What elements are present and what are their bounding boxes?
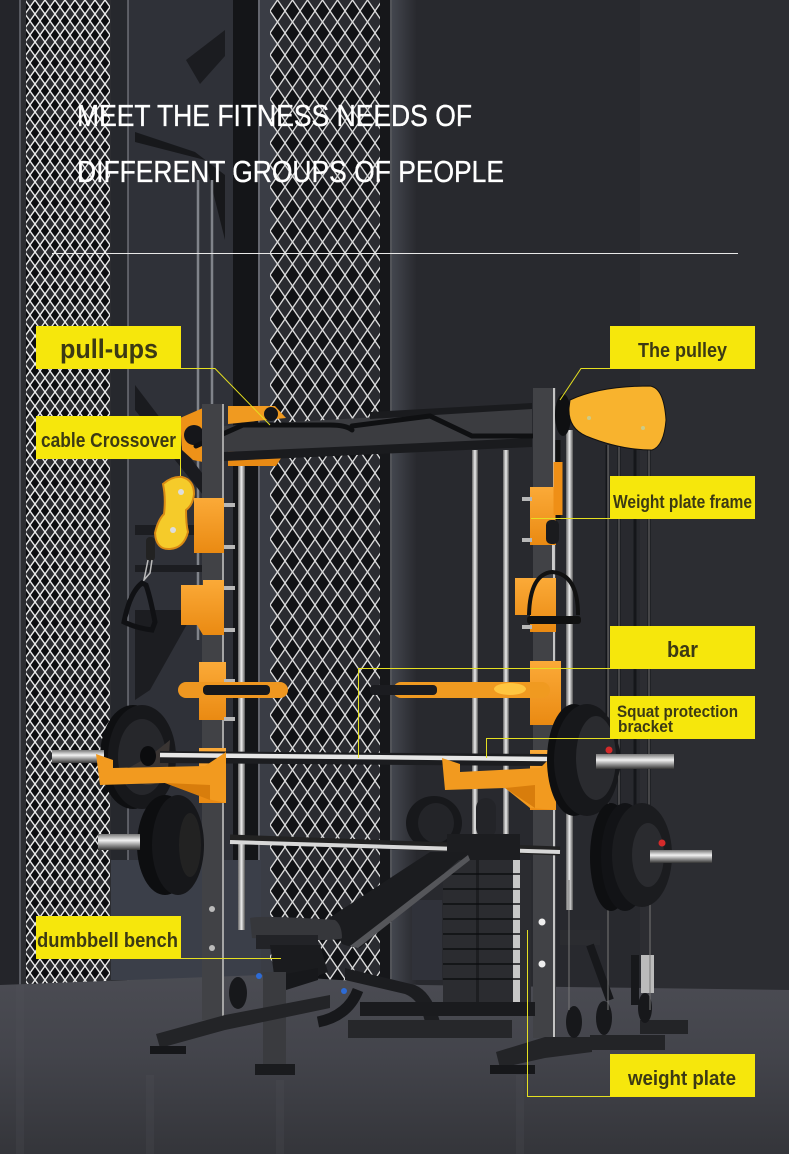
title: MEET THE FITNESS NEEDS OF (77, 98, 472, 133)
label: pull-ups (36, 326, 270, 425)
title: DIFFERENT GROUPS OF PEOPLE (77, 154, 504, 189)
top cross beam (196, 403, 532, 461)
label: weight plate: weight plate (627, 1068, 736, 1090)
label: bar (358, 626, 755, 758)
top barbell right plates (547, 704, 674, 816)
cable handle right (527, 440, 581, 624)
label: Squat protection bracket: Squat protection (617, 702, 738, 721)
title divider (52, 253, 738, 254)
lower barbell (230, 839, 560, 852)
dip bars (178, 682, 550, 698)
adjustable bench (250, 852, 512, 1075)
lower barbell left plates (98, 795, 204, 895)
label: Squat protection bracket (486, 696, 755, 758)
label: dumbbell bench (36, 916, 281, 959)
label: Weight plate frame: Weight plate frame (613, 492, 752, 512)
orange column brackets (181, 487, 561, 810)
wire mesh panels (26, 0, 380, 985)
label: dumbbell bench: dumbbell bench (37, 930, 178, 952)
label: cable Crossover: cable Crossover (41, 430, 176, 452)
label: cable Crossover (36, 416, 181, 476)
pulley housing left (180, 406, 286, 466)
rear plates (406, 796, 496, 850)
floor (0, 975, 789, 1154)
pulley block right (555, 386, 666, 450)
base feet (150, 995, 688, 1074)
safety spotter arms (96, 752, 556, 810)
uprights (202, 388, 556, 1038)
rear frame and small pulleys (229, 880, 654, 1038)
cable handle left (124, 537, 155, 630)
lower barbell right plates (590, 803, 712, 911)
title (77, 98, 504, 189)
top barbell left plates (100, 705, 176, 809)
label: The pulley: The pulley (638, 340, 728, 362)
gym machine (52, 386, 712, 1075)
bolts (224, 497, 532, 721)
label: weight plate (528, 930, 755, 1097)
label: Weight plate frame (531, 476, 755, 519)
label: pull-ups: pull-ups (60, 334, 158, 364)
label: Squat protection bracket: bracket (618, 717, 673, 736)
label: bar: bar (667, 637, 698, 662)
label: The pulley (560, 326, 755, 400)
weight stack (443, 834, 531, 1002)
top barbell (52, 750, 548, 763)
rear cables and rods (238, 430, 649, 930)
yellow pulley plate left (155, 477, 194, 549)
